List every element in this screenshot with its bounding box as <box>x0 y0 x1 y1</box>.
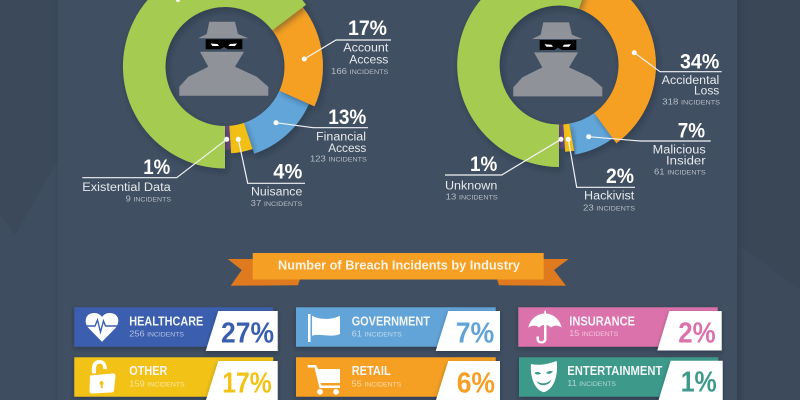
callout: Existential Data 1%: 9 INCIDENTS <box>126 195 171 204</box>
bar: Other 17% <box>74 357 278 400</box>
icon: theatre mask <box>531 361 557 392</box>
chart: right donut, breach sources <box>457 0 656 167</box>
bar: Healthcare 27%: 27% <box>221 317 274 349</box>
callout: Nuisance 4%: Nuisance <box>251 187 302 199</box>
callout: Malicious Insider 7%: Malicious <box>653 145 706 157</box>
callout: Malicious Insider 7%: 7% <box>678 119 705 142</box>
callout: Accidental Loss 34% <box>632 50 722 106</box>
callout: Account Access 17%: 17% <box>348 17 387 40</box>
icon: heart with pulse <box>86 313 118 342</box>
bar: Retail 6%: RETAIL <box>352 364 391 378</box>
bar: Entertainment 1%: ENTERTAINMENT <box>567 364 663 378</box>
bar: Retail 6%: 55 INCIDENTS <box>352 380 401 389</box>
bar: Other 17%: OTHER <box>129 364 167 378</box>
callout: Existential Data 1% <box>82 137 229 204</box>
callout: Accidental Loss 34%: 34% <box>680 50 720 73</box>
bar: Entertainment 1%: 1% <box>681 367 717 399</box>
bar: Government 7% <box>296 307 500 351</box>
chart: left donut, breach types <box>123 0 323 169</box>
callout: Unknown 1%: 1% <box>470 153 498 176</box>
callout: Financial Access 13%: 13% <box>328 106 367 129</box>
bar: Government 7%: 7% <box>456 318 494 350</box>
bar: Healthcare 27%: 256 INCIDENTS <box>129 330 184 339</box>
callout: Malicious Insider 7% <box>586 119 711 177</box>
callout: Hackivist 2% <box>566 137 635 213</box>
bar: Retail 6% <box>296 357 500 400</box>
callout: Malicious Insider 7%: 61 INCIDENTS <box>654 168 706 177</box>
banner: section heading ribbon <box>228 253 569 286</box>
callout: Account Access 17%: Access <box>349 54 389 66</box>
callout: Existential Data 1%: 1% <box>143 156 171 179</box>
callout: Account Access 17% <box>302 17 391 76</box>
callout: Hackivist 2%: 23 INCIDENTS <box>583 204 635 213</box>
bar: Retail 6%: 6% <box>457 368 495 400</box>
bar: Other 17%: 159 INCIDENTS <box>129 380 185 389</box>
callout: Account Access 17%: Account <box>343 43 389 55</box>
bar: Insurance 2%: 15 INCIDENTS <box>569 329 618 338</box>
bar: Insurance 2% <box>518 307 722 350</box>
bar: Healthcare 27%: HEALTHCARE <box>129 314 203 328</box>
icon: flag <box>308 314 340 342</box>
callout: Nuisance 4%: 37 INCIDENTS <box>251 199 302 208</box>
bar: Government 7%: GOVERNMENT <box>352 315 430 329</box>
callout: Accidental Loss 34%: Accidental <box>662 75 719 87</box>
callout: Hackivist 2%: Hackivist <box>584 190 635 202</box>
bar: Insurance 2%: INSURANCE <box>569 314 635 328</box>
bar: Healthcare 27% <box>74 307 278 351</box>
icon: left spy <box>179 22 268 96</box>
bar: Other 17%: 17% <box>222 368 272 400</box>
callout: Existential Data 1%: Existential Data <box>82 182 171 194</box>
callout: Malicious Insider 7%: Insider <box>666 156 706 168</box>
icon: umbrella <box>528 311 562 344</box>
bar: Insurance 2%: 2% <box>678 318 716 350</box>
banner: section heading ribbon: Number of Breach Incidents by Industry <box>278 258 520 272</box>
callout: Financial Access 13% <box>274 106 368 164</box>
icon: right spy <box>513 22 602 96</box>
callout: Financial Access 13%: Financial <box>316 132 366 144</box>
callout: Financial Access 13%: Access <box>328 143 367 155</box>
bar: Entertainment 1% <box>519 357 723 400</box>
callout: Hackivist 2%: 2% <box>606 165 634 188</box>
callout: Account Access 17%: 166 INCIDENTS <box>331 67 388 76</box>
callout: Unknown 1%: 13 INCIDENTS <box>446 192 498 201</box>
callout: Nuisance 4% <box>236 137 305 208</box>
icon: shopping cart <box>308 365 340 395</box>
bar: Entertainment 1%: 11 INCIDENTS <box>567 379 616 388</box>
callout: Nuisance 4%: 4% <box>273 160 303 183</box>
callout: Unknown 1%: Unknown <box>445 180 497 192</box>
bar: Government 7%: 61 INCIDENTS <box>352 330 402 339</box>
icon: open padlock <box>90 360 116 394</box>
callout: Financial Access 13%: 123 INCIDENTS <box>310 155 367 164</box>
callout: Accidental Loss 34%: 318 INCIDENTS <box>662 97 720 106</box>
callout: Unknown 1% <box>445 137 564 201</box>
callout: Accidental Loss 34%: Loss <box>694 86 720 98</box>
